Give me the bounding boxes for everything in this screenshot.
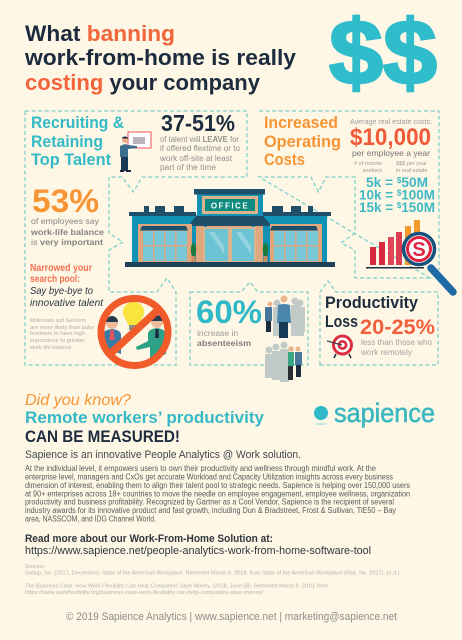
heading: increased operating costs: Increased bbox=[264, 113, 338, 132]
stat: 37-51 percent: work off-site at least bbox=[159, 154, 233, 163]
icon: target with arrow bbox=[327, 334, 353, 358]
text block: sources: The Business Case: How Work Flexibility Can Help Companies Save Money. (2018, June 08). Retrieved March 6, 2019, from bbox=[25, 584, 328, 590]
stat: savings by remote worker count: $ bbox=[397, 201, 402, 210]
heading: did you know: Remote workers’ productivity bbox=[25, 408, 265, 427]
stat: real estate costs: $10,000 bbox=[350, 124, 431, 151]
icon: presenter with chart board bbox=[120, 132, 151, 172]
stat: 53 percent: of employees say bbox=[31, 216, 100, 226]
heading: did you know: Did you know? bbox=[25, 392, 131, 409]
stat: real estate costs bbox=[350, 117, 432, 174]
icon: magnifier with dollar: S bbox=[412, 239, 426, 261]
text block: sapience description: productivity and business profitability. Recognized by Gartner as a Cool Vendor, Sapience is the recipient of several bbox=[25, 498, 394, 507]
heading: did you know: CAN BE MEASURED! bbox=[25, 427, 180, 446]
stat: savings by remote worker count: 10k = bbox=[359, 188, 393, 202]
text block: sources: Gallup, Inc. (2017, December). State of the American Workplace. Retrieved March 6, 2019, from State of the American Workplace (Rep. No. 2017). (n.d.). bbox=[25, 570, 401, 576]
stat: savings by remote worker count: $ bbox=[397, 176, 402, 185]
icon: no innovation sign bbox=[101, 298, 168, 366]
text block: sapience description: At the individual level, it empowers users to own their productivity and wellness through mindful work. At the bbox=[25, 464, 377, 473]
text block: sapience intro: Sapience is an innovative People Analytics @ Work solution. bbox=[25, 449, 301, 461]
stat: 60 percent absenteeism: 60% bbox=[196, 294, 262, 330]
stat: productivity loss: less than those who bbox=[361, 338, 433, 347]
heading: recruiting and retaining top talent: Recruiting & bbox=[31, 113, 124, 132]
stat: real estate costs: in real estate bbox=[396, 168, 428, 174]
call to action: read more link: Read more about our Work-From-Home Solution at: bbox=[25, 533, 273, 545]
title: work-from-home is really bbox=[24, 45, 297, 70]
text block: narrowed search pool: search pool: bbox=[30, 274, 80, 285]
text block: sapience description bbox=[25, 464, 410, 524]
text block: narrowed search pool: are more likely than baby bbox=[30, 325, 94, 331]
stat: savings by remote worker count: $ bbox=[397, 188, 402, 198]
heading: increased operating costs: Costs bbox=[264, 150, 305, 169]
footer: © 2019 Sapience Analytics | www.sapience.net | marketing@sapience.net bbox=[66, 611, 397, 623]
text block: narrowed search pool: importance to greater bbox=[30, 338, 85, 344]
title bbox=[24, 21, 297, 95]
title: What banning bbox=[25, 21, 175, 46]
text block: sources: https://www.workflexibility.org/business-case-work-flexibility-can-help-companies-save-money/ bbox=[25, 590, 264, 596]
text block: sources: Sources: bbox=[25, 564, 45, 570]
stat: real estate costs: $$$ per year bbox=[396, 161, 427, 167]
text block: sources bbox=[25, 564, 401, 596]
text block: narrowed search pool: Millennials and GenXers bbox=[30, 318, 86, 324]
icon: magnifier with dollar bbox=[404, 234, 453, 292]
text block: narrowed search pool bbox=[29, 263, 104, 351]
stat: productivity loss bbox=[325, 294, 435, 357]
panel frame: productivity loss bbox=[320, 281, 438, 365]
stat: 37-51 percent bbox=[159, 110, 241, 172]
logo: sapience: sapience bbox=[334, 398, 435, 428]
stat: 60 percent absenteeism: increase in bbox=[197, 328, 238, 338]
panel frame: absenteeism bbox=[190, 282, 308, 365]
heading: recruiting and retaining top talent bbox=[31, 113, 124, 169]
text block: sapience description: at 90+ enterprises across 18+ countries to move the needle on employee engagement, employee wellness, organization bbox=[25, 490, 410, 498]
stat: 37-51 percent: 37-51% bbox=[161, 110, 235, 136]
stat: productivity loss: Productivity bbox=[325, 294, 419, 312]
panel frame: operating costs bbox=[259, 111, 439, 278]
stat: 53 percent: is very important bbox=[31, 237, 103, 247]
icon: dollar signs: $$ bbox=[329, 2, 437, 104]
stat: 60 percent absenteeism bbox=[196, 294, 262, 348]
stat: savings by remote worker count: 100M bbox=[401, 188, 435, 202]
stat: real estate costs: per employee a year bbox=[352, 148, 430, 158]
text block: narrowed search pool: work-life balance. bbox=[29, 345, 73, 351]
heading: increased operating costs: Operating bbox=[264, 132, 341, 151]
stat: 37-51 percent: of talent will LEAVE for bbox=[160, 135, 239, 144]
stat: productivity loss: work remotely bbox=[360, 348, 412, 357]
illustration: office building: OFFICE bbox=[211, 202, 249, 210]
illustration: office building bbox=[125, 189, 335, 267]
illustration: present and absent workers bbox=[265, 296, 305, 382]
stat: 60 percent absenteeism: absenteeism bbox=[197, 338, 251, 348]
title: costing your company bbox=[25, 70, 261, 95]
stat: real estate costs: Average real estate costs: bbox=[350, 117, 432, 126]
heading: recruiting and retaining top talent: Top Talent bbox=[31, 150, 111, 169]
text block: sapience description: industry awards for its innovative product and fast growth, including Dun & Bradstreet, Frost & Sullivan, TiE50 – Bay bbox=[25, 506, 396, 515]
stat: productivity loss: 20-25% bbox=[360, 316, 435, 339]
stat: productivity loss: Loss bbox=[325, 313, 358, 331]
stat: savings by remote worker count: 5k = bbox=[366, 175, 393, 190]
text block: narrowed search pool: boomers to have high bbox=[30, 331, 85, 337]
stat: savings by remote worker count: 150M bbox=[401, 200, 435, 215]
text block: narrowed search pool: Narrowed your bbox=[30, 263, 92, 274]
stat: 53 percent bbox=[30, 183, 104, 247]
stat: 53 percent: work-life balance bbox=[30, 227, 104, 237]
text block: narrowed search pool: innovative talent bbox=[30, 297, 104, 309]
stat: real estate costs: # of remote bbox=[354, 161, 382, 167]
stat: 53 percent: 53% bbox=[32, 183, 99, 219]
text block: sapience description: dimension of interest, enabling them to align their talent pool to strategic needs. Sapience is helping over 150,000 users bbox=[25, 481, 410, 490]
panel frame: recruiting and talent bbox=[25, 111, 247, 365]
stat: 37-51 percent: part of the time bbox=[160, 163, 217, 172]
stat: savings by remote worker count: 50M bbox=[401, 175, 428, 190]
text block: sapience description: area, NASSCOM, and IDG Channel World. bbox=[25, 514, 156, 524]
heading: did you know bbox=[25, 392, 265, 446]
stat: savings by remote worker count bbox=[359, 175, 435, 215]
stat: real estate costs: workers bbox=[362, 168, 382, 174]
text block: sapience description: enterprise level, managers and CxOs get accurate Workload and Capacity Utilization insights across every business bbox=[25, 472, 393, 482]
text block: narrowed search pool: Say bye-bye to bbox=[30, 285, 93, 297]
call to action: read more link: https://www.sapience.net/people-analytics-work-from-home-software-tool bbox=[25, 545, 371, 557]
stat: 37-51 percent: if offered flextime or to bbox=[160, 144, 241, 153]
stat: savings by remote worker count: 15k = bbox=[359, 200, 393, 215]
call to action: read more link bbox=[25, 533, 371, 557]
chart: rising cost bars bbox=[366, 220, 424, 268]
heading: increased operating costs bbox=[264, 113, 341, 169]
heading: recruiting and retaining top talent: Retaining bbox=[31, 132, 103, 151]
